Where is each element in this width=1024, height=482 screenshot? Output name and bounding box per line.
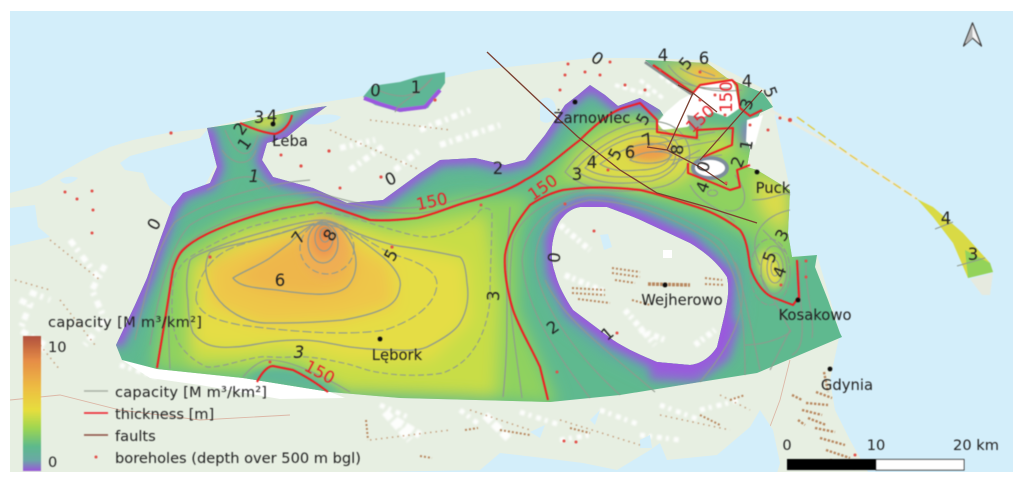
map labels bbox=[143, 46, 978, 394]
capacity contour numbers: 4 bbox=[941, 209, 951, 228]
lake Zarnowiec bbox=[540, 98, 556, 123]
capacity contour numbers: 5 bbox=[675, 53, 696, 74]
capacity contour numbers: 5 bbox=[380, 246, 402, 265]
legend item: capacity: capacity [M m³/km²] bbox=[115, 384, 267, 401]
city markers and names bbox=[271, 100, 873, 394]
capacity contour numbers: 1 bbox=[411, 78, 421, 97]
capacity contour numbers: 4 bbox=[658, 46, 668, 65]
scale bar bbox=[782, 437, 999, 470]
capacity contour numbers: 1 bbox=[736, 138, 757, 152]
city markers and names: Lębork bbox=[372, 347, 423, 364]
capacity contour numbers: 5 bbox=[604, 145, 626, 164]
faults bbox=[487, 52, 762, 223]
legend item: faults bbox=[84, 428, 156, 445]
lake Lebsko bbox=[120, 130, 216, 208]
inland water bbox=[60, 177, 652, 448]
capacity contour numbers: 3 bbox=[771, 226, 793, 245]
thickness contour numbers: 150 bbox=[414, 189, 449, 214]
capacity contour numbers: 1 bbox=[234, 134, 255, 154]
capacity contour numbers: 5 bbox=[759, 84, 781, 100]
icon: north arrow bbox=[964, 23, 982, 46]
capacity contour numbers: 2 bbox=[727, 154, 749, 170]
capacity contour numbers: 4 bbox=[267, 107, 277, 126]
capacity contour numbers: 6 bbox=[625, 143, 635, 162]
legend item: faults: faults bbox=[115, 428, 156, 445]
capacity contour numbers: 4 bbox=[692, 179, 714, 195]
capacity raster surface bbox=[100, 50, 860, 410]
capacity contour numbers: 3 bbox=[968, 245, 978, 264]
city markers and names: Wejherowo bbox=[641, 292, 723, 309]
legend colour ramp bbox=[23, 336, 41, 471]
thickness contour numbers bbox=[301, 81, 736, 388]
capacity contour numbers: 0 bbox=[545, 251, 564, 264]
legend item: thickness: thickness [m] bbox=[115, 406, 214, 423]
capacity contour numbers: 5 bbox=[759, 249, 781, 265]
ramp labels: 10 bbox=[48, 339, 67, 356]
legend bbox=[23, 314, 361, 471]
capacity contour numbers: 3 bbox=[484, 290, 503, 301]
thickness contour numbers: 150 bbox=[301, 356, 338, 388]
capacity contour numbers: 8 bbox=[668, 143, 687, 156]
blue-teal transition bands bbox=[116, 85, 727, 365]
capacity contour numbers: 0 bbox=[369, 81, 382, 100]
scale bar: 0 bbox=[782, 437, 792, 454]
capacity contour numbers: 2 bbox=[230, 119, 251, 139]
capacity contour numbers: 4 bbox=[769, 264, 791, 280]
land base map bbox=[10, 58, 868, 472]
Hel peninsula strip bbox=[917, 199, 993, 278]
borehole dots bbox=[64, 60, 856, 456]
capacity contour numbers: 4 bbox=[742, 72, 752, 91]
capacity contour numbers: 3 bbox=[254, 108, 264, 127]
capacity contour numbers: 5 bbox=[632, 110, 654, 129]
roads bbox=[10, 360, 790, 426]
capacity contour numbers: 4 bbox=[587, 153, 597, 172]
ramp labels: 0 bbox=[48, 454, 57, 471]
capacity contour numbers: 3 bbox=[736, 96, 758, 112]
lake Sarbsko bbox=[304, 114, 341, 124]
capacity contour numbers: 0 bbox=[382, 168, 399, 190]
capacity contour numbers: 0 bbox=[587, 48, 607, 69]
capacity contour numbers: 1 bbox=[597, 323, 618, 344]
capacity contour numbers: 8 bbox=[319, 226, 341, 245]
capacity contour numbers: 6 bbox=[699, 49, 709, 68]
thickness contour numbers: 150 bbox=[717, 81, 736, 113]
capacity contour numbers: 0 bbox=[143, 215, 165, 234]
white open land patches bbox=[20, 75, 740, 440]
city markers and names: Żarnowiec bbox=[554, 109, 630, 127]
capacity contour numbers: 0 bbox=[693, 159, 714, 174]
city markers and names: Kosakowo bbox=[778, 307, 852, 324]
scale bar: 20 km bbox=[953, 437, 999, 454]
city markers and names: Łeba bbox=[271, 133, 308, 150]
capacity contour numbers: 2 bbox=[543, 317, 563, 338]
scale bar: 10 bbox=[867, 437, 885, 454]
purple zero-capacity edges bbox=[116, 85, 747, 374]
city markers and names: Gdynia bbox=[821, 377, 873, 394]
capacity holes near Puck Bay bbox=[645, 62, 763, 178]
capacity contour numbers: 1 bbox=[249, 167, 259, 186]
Hel tip land bbox=[970, 273, 993, 295]
western lake bbox=[10, 205, 50, 246]
thickness contour numbers: 150 bbox=[524, 171, 561, 204]
capacity contour numbers: 3 bbox=[294, 343, 304, 362]
isolated capacity patches bbox=[363, 72, 993, 295]
patch north of Lebork bbox=[363, 72, 445, 112]
city markers and names: Puck bbox=[756, 180, 791, 197]
ramp labels bbox=[48, 339, 67, 471]
capacity contour numbers: 7 bbox=[639, 129, 656, 151]
thickness isolines 150 m bbox=[157, 65, 799, 400]
capacity contour numbers: 6 bbox=[275, 271, 285, 290]
thickness contour numbers: 150 bbox=[682, 101, 718, 137]
capacity contour numbers: 2 bbox=[493, 159, 503, 178]
capacity contour lines bbox=[135, 65, 985, 398]
capacity contour numbers bbox=[143, 46, 978, 362]
legend colour ramp title: capacity [M m³/km²] bbox=[48, 314, 202, 331]
legend item: boreholes: boreholes (depth over 500 m bgl) bbox=[115, 450, 361, 467]
capacity contour numbers: 3 bbox=[572, 165, 582, 184]
capacity contour numbers: 7 bbox=[288, 228, 309, 248]
urban areas bbox=[15, 120, 855, 468]
